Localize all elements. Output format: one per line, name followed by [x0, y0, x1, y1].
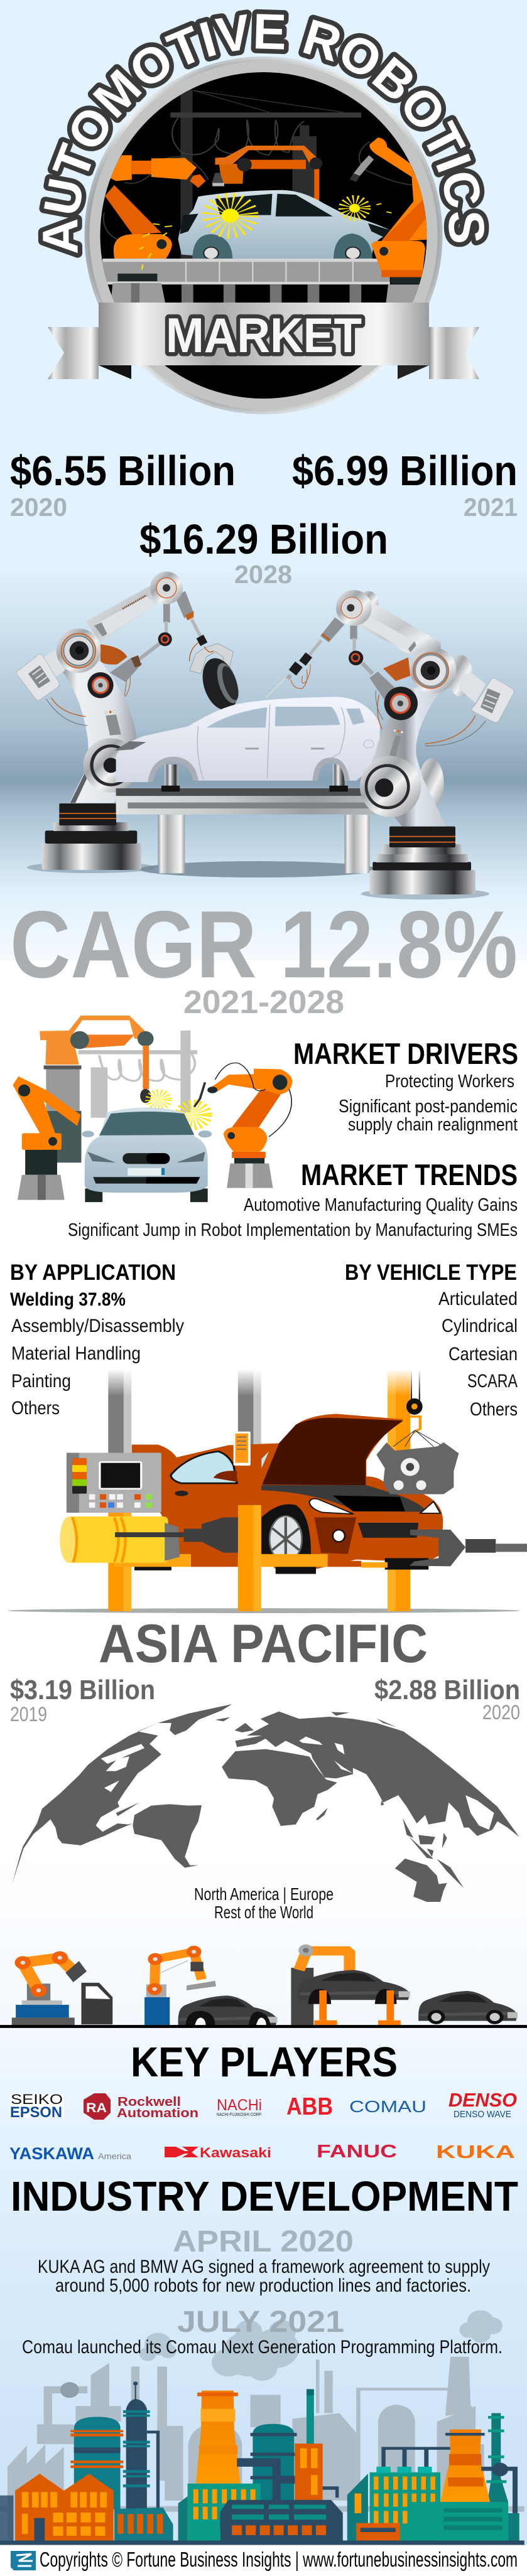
center teal tank [253, 2424, 294, 2501]
table and white car [114, 697, 380, 873]
application list: Assembly/Disassembly [11, 1316, 184, 1336]
world map [12, 1704, 519, 1902]
Greenland [158, 1704, 232, 1735]
stat: 2020 year: 2020 [10, 493, 67, 522]
left orange factory [0, 2496, 13, 2540]
logo: Yaskawa: YASKAWA [9, 2144, 94, 2163]
logo: Nachi: NACHI-FUJIKOSHI CORP. [217, 2113, 262, 2117]
right clamp [410, 1530, 465, 1566]
right orange robot [227, 1164, 273, 1188]
gray background factories [0, 2357, 524, 2540]
vehicle type list: Articulated [438, 1289, 518, 1309]
stat: 2020 value: $6.55 Billion [10, 448, 236, 495]
application list: Others [11, 1398, 60, 1419]
teal building [178, 2496, 188, 2540]
North America [12, 1723, 161, 1884]
vehicle type list: Cartesian [448, 1344, 518, 1365]
stat: 2020 year: 2020 [482, 1701, 520, 1724]
application list: Welding 37.8% [10, 1289, 126, 1310]
Eurasia [236, 1712, 519, 1837]
emblem: silver oval with factory scene [87, 59, 440, 412]
heading: key players: KEY PLAYERS [131, 2039, 398, 2086]
ground [0, 2540, 524, 2545]
logo: Rockwell Automation: RA [86, 2101, 107, 2115]
illustration: robot assembly line with dark cars [0, 1945, 527, 2028]
car [132, 1414, 443, 1569]
piston arm [163, 603, 170, 623]
right silver robot [266, 590, 514, 894]
date: July 2021: JULY 2021 [177, 2305, 344, 2339]
stat: 2019 year: 2019 [10, 1703, 47, 1725]
regions line 2: Rest of the World [214, 1902, 313, 1922]
heading: Asia Pacific: ASIA PACIFIC [99, 1614, 428, 1674]
left silver robot [16, 572, 244, 870]
logo: Kawasaki [165, 2145, 271, 2160]
hook and engine [406, 1398, 423, 1415]
illustration: factory skyline [0, 2310, 527, 2576]
logo: Seiko Epson: EPSON [10, 2104, 62, 2121]
posts [108, 1370, 124, 1457]
orange tower 2 [440, 2430, 490, 2502]
illustration: orange car on lift with engine [8, 1369, 527, 1613]
logo: Yaskawa: America [98, 2151, 131, 2161]
South America [133, 1804, 202, 1868]
illustration: orange robots welding car front [13, 1016, 293, 1202]
logo: Denso: DENSO [448, 2089, 517, 2111]
right piston arms [350, 626, 357, 639]
logo: Rockwell Automation [84, 2093, 198, 2120]
vehicle type list [438, 1289, 518, 1420]
stat: 2028 value: $16.29 Billion [139, 516, 388, 563]
logo: Yaskawa [9, 2144, 131, 2163]
robot 3 [291, 1968, 313, 2025]
ribbon: MARKET banner [48, 303, 479, 379]
illustration: silver robots assembling white car [16, 572, 514, 899]
orange cooling tower [196, 2391, 241, 2484]
main joints [57, 628, 101, 673]
date: April 2020: APRIL 2020 [173, 2225, 354, 2258]
Australia [395, 1859, 447, 1902]
platform [114, 1554, 191, 1567]
control panel [67, 1453, 161, 1513]
heading: by application: BY APPLICATION [10, 1260, 176, 1285]
right teal building [381, 2447, 450, 2469]
logo: Fanuc: FANUC [317, 2142, 397, 2162]
stat: 2021 year: 2021 [464, 493, 518, 522]
stat: 2019 value: $3.19 Billion [10, 1675, 155, 1705]
Africa [222, 1749, 337, 1826]
car front [85, 1188, 102, 1202]
yellow cylinder [65, 1516, 168, 1563]
stat: 2028 year: 2028 [234, 560, 292, 589]
gripper and tire [190, 643, 234, 676]
application list: Material Handling [11, 1343, 141, 1364]
vehicle type list: Others [470, 1399, 518, 1420]
conveyor [102, 260, 390, 284]
car 4 [418, 1991, 518, 2021]
logo: Nachi: NACHi [217, 2096, 262, 2114]
remote [234, 1432, 251, 1466]
Asian islands [403, 1818, 413, 1838]
logo: Seiko Epson: SEIKO [11, 2091, 63, 2107]
lower wheel [84, 738, 138, 793]
application list: Painting [11, 1371, 71, 1392]
logo: Seiko Epson [10, 2091, 64, 2121]
CAGR period: 2021-2028 [183, 984, 344, 1021]
ground shadows [27, 861, 489, 899]
logo: ABB: ABB [286, 2093, 333, 2120]
right teal chimney [487, 2413, 508, 2502]
vehicle type list: Cylindrical [442, 1316, 518, 1336]
title: Automotive Robotics on arc: AUTOMOTIVE ROBOTICS [38, 9, 489, 258]
logo: Kawasaki: Kawasaki [200, 2145, 271, 2160]
footer logo icon [11, 2551, 36, 2570]
clamp arm [115, 1532, 184, 1537]
sparks [216, 204, 244, 227]
logo: Rockwell Automation: Rockwell [117, 2095, 181, 2109]
logo: Denso: DENSO WAVE [454, 2109, 511, 2120]
regions line 1: North America | Europe [194, 1884, 334, 1904]
heading: MARKET: MARKET [166, 308, 362, 363]
logo: Comau: COMAU [349, 2097, 426, 2116]
car [178, 190, 390, 259]
map gaps [101, 1737, 494, 1830]
car 1 [178, 1995, 277, 2026]
logo: Rockwell Automation: Automation [117, 2106, 198, 2120]
sparks [152, 1095, 165, 1105]
floor [0, 2025, 527, 2028]
scene: welding line [102, 90, 428, 304]
logo: Kuka: KUKA [436, 2142, 515, 2162]
smoke clouds [139, 2310, 503, 2381]
application list [10, 1289, 184, 1419]
